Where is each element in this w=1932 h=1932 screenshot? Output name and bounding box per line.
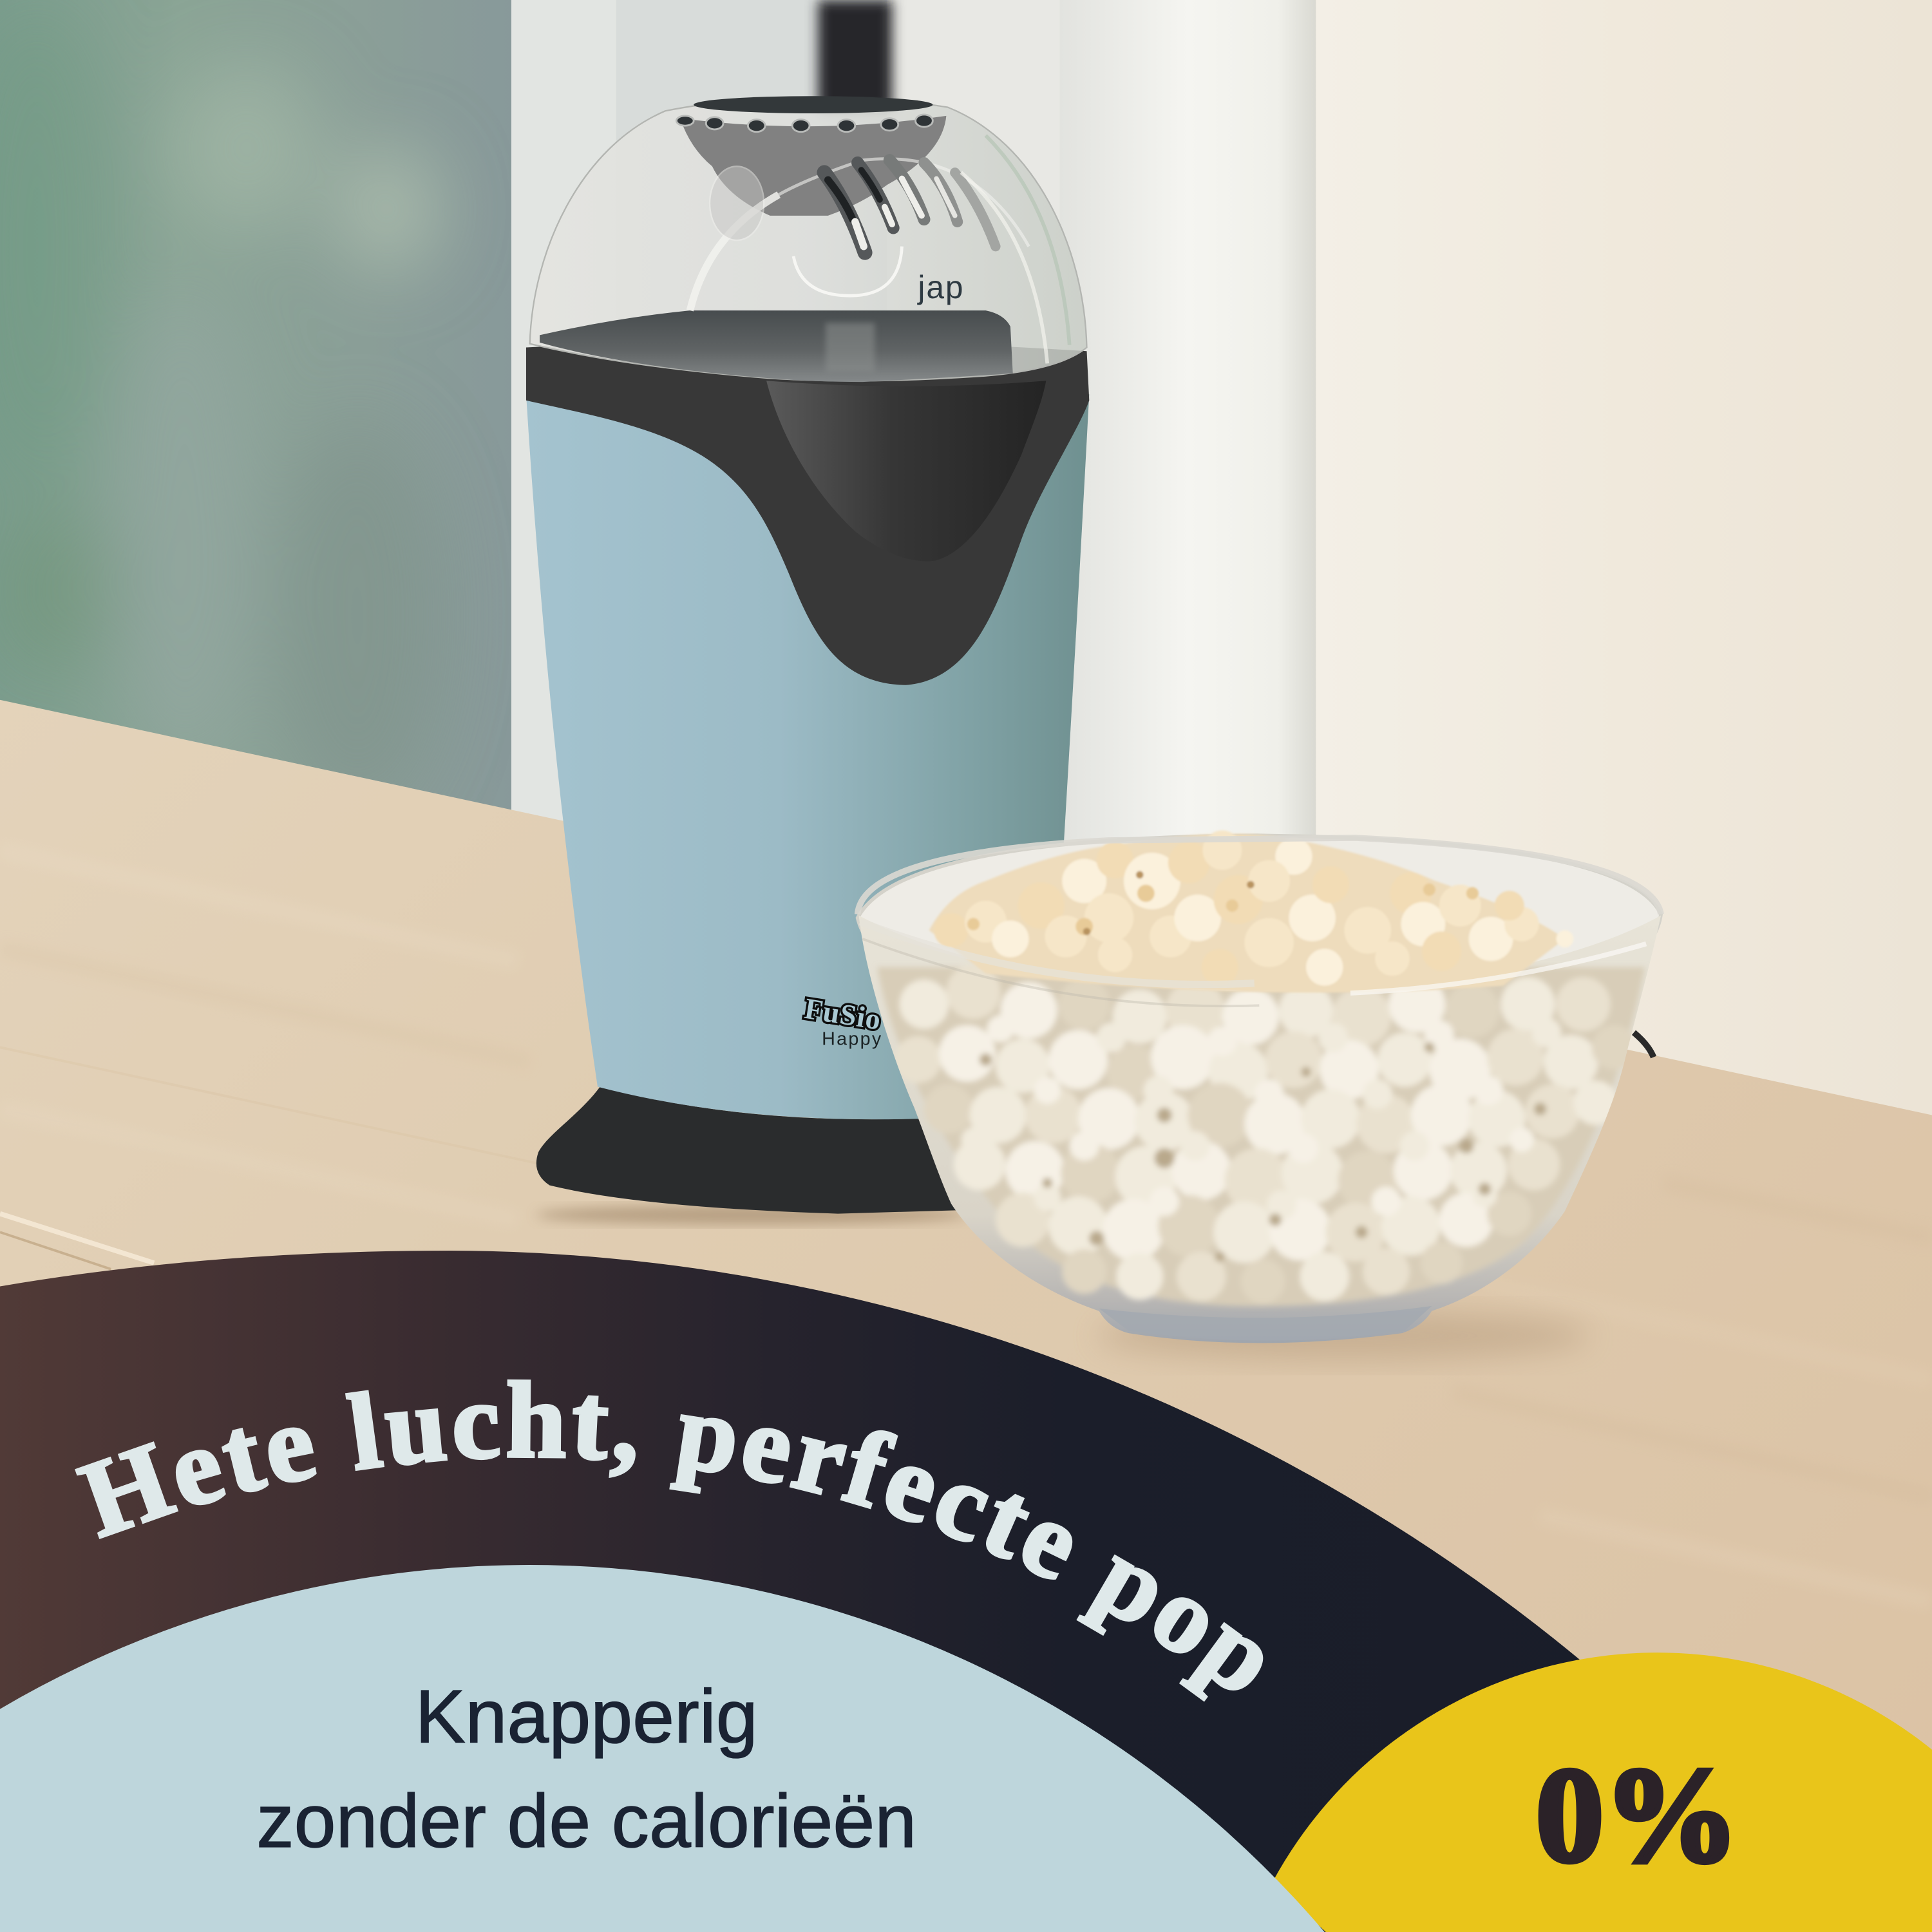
chute arc [690,194,779,310]
window with blurred garden [0,0,515,838]
table plank seams [0,1214,154,1263]
cable behind bowl [1634,1032,1654,1057]
soft shadows on the table [1097,1311,1589,1360]
chute slots [824,160,996,252]
grey inner floor [540,310,1013,382]
glass front rim [860,922,1255,985]
subtitle line two: zonder de calorieën [256,1779,916,1863]
brand logo on body: Happy [822,1028,883,1049]
dome body [530,97,1087,381]
glass bowl with popcorn [858,831,1661,1343]
dark post behind dome [818,0,892,111]
spout [766,381,1046,562]
light blue panel [0,1565,1325,1932]
popcorn machine [526,96,1089,1214]
machine base [536,1087,973,1214]
curved headline: Hete lucht, perfecte pop [75,1379,1264,1701]
grey funnel [680,116,946,216]
glass base [1099,1306,1432,1341]
air holes [676,115,933,132]
jap logo: jap [916,269,964,305]
wood grain streaks [0,850,1932,1602]
yellow badge [1273,1653,1932,1932]
zero percent label: 0% [1536,1739,1739,1890]
wooden table [0,699,1932,1750]
popcorn above rim [929,831,1573,992]
dome side highlights [986,135,1070,345]
machine blue body [526,394,1089,1119]
popcorn mass base [877,967,1645,1306]
top opening [694,96,933,113]
dark curved banner [0,1251,1932,1932]
disc reflection [793,247,902,296]
bowl lower body [859,916,1661,1343]
bowl back wall [858,835,1661,1004]
clear dome [530,96,1087,382]
black collar [526,341,1089,685]
popcorn seen through the glass [877,965,1645,1306]
warm popcorn mass base [929,834,1565,992]
brand logo on body: FuSio [802,992,884,1036]
pale window frame and curtain columns [511,0,1932,1146]
subtitle line one: Knapperig [415,1674,758,1758]
reflection in floor [826,323,875,372]
